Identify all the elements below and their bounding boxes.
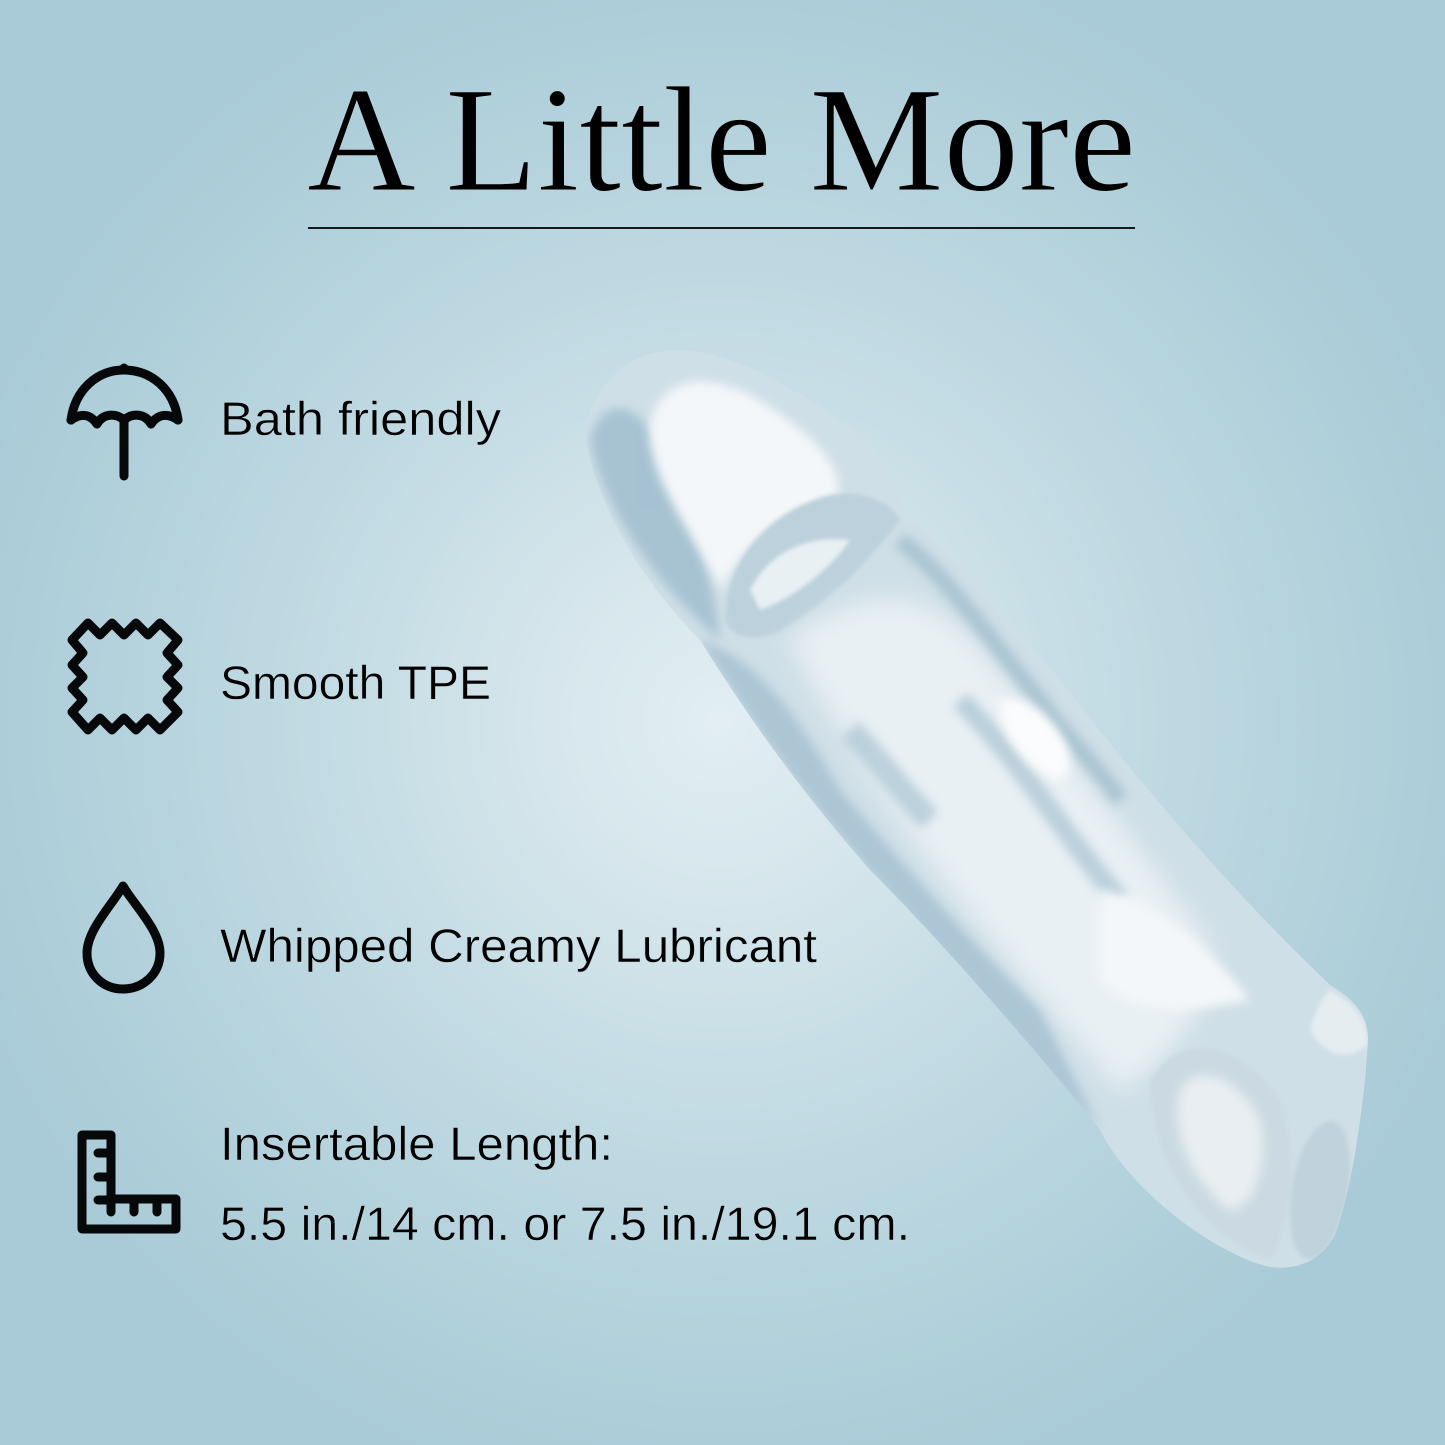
label: Whipped Creamy Lubricant (220, 919, 817, 972)
icon: water drop (87, 886, 160, 989)
feature: bath friendly (71, 368, 502, 476)
icon: ruler square (82, 1135, 176, 1229)
icon: zigzag fabric swatch (72, 623, 178, 730)
icon: umbrella (71, 368, 178, 476)
label: Insertable Length: (220, 1117, 613, 1170)
feature: smooth TPE (72, 623, 491, 730)
title underline (308, 227, 1135, 229)
label: 5.5 in./14 cm. or 7.5 in./19.1 cm. (220, 1197, 910, 1250)
label: Smooth TPE (220, 656, 491, 709)
label (220, 1117, 910, 1250)
feature: lubricant (87, 886, 817, 989)
product: clear translucent TPE sleeve (585, 350, 1368, 1268)
title: A Little More (307, 57, 1136, 223)
label: Bath friendly (220, 392, 502, 445)
feature: insertable length (82, 1117, 910, 1250)
